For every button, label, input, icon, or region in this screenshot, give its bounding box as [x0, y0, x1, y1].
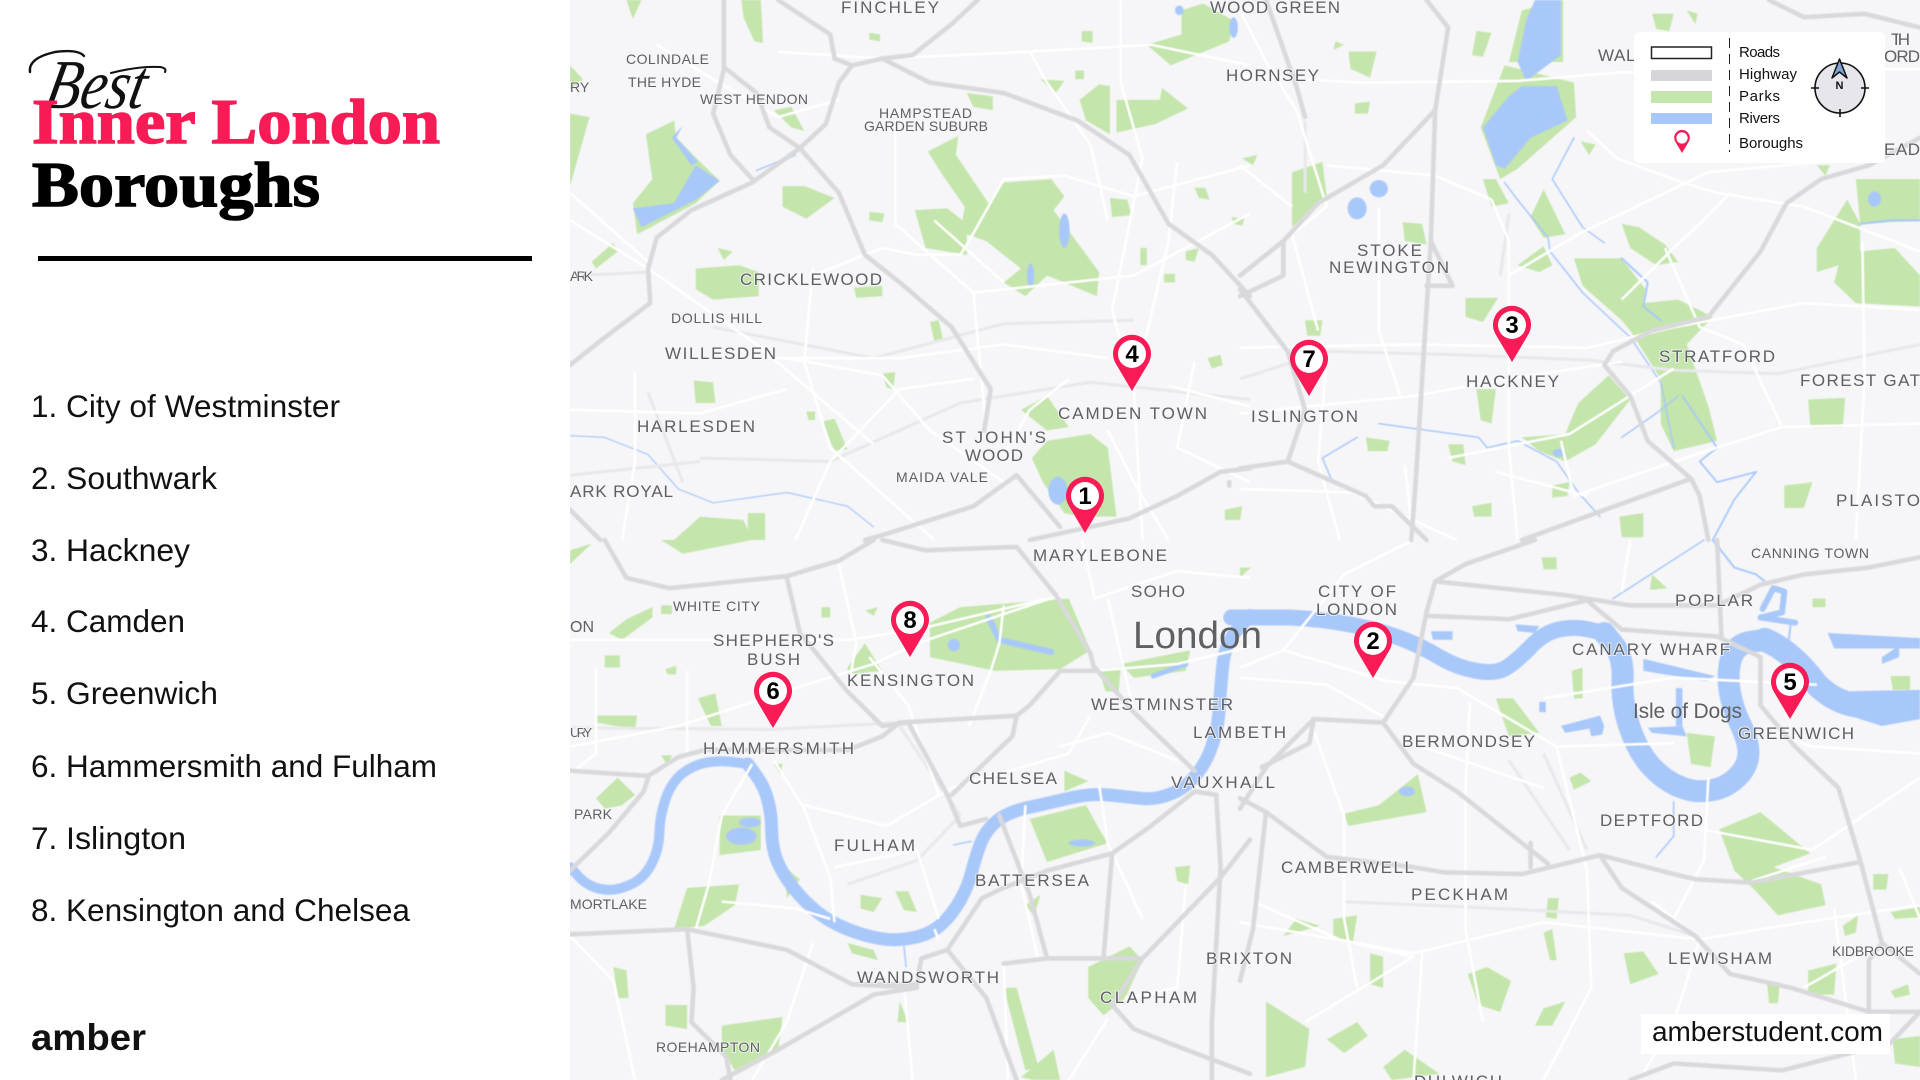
map place labels: WILLESDEN	[665, 344, 776, 363]
map place labels: BERMONDSEY	[1402, 732, 1535, 751]
map place labels: HARLESDEN	[637, 417, 755, 436]
map place labels: BATTERSEA	[975, 871, 1090, 890]
pin 7 Islington	[1290, 340, 1328, 396]
icon: compass	[1811, 59, 1869, 117]
map place labels: CITY OF	[1318, 582, 1396, 601]
panel: map legend: Highway	[1739, 66, 1798, 83]
pin 1 City of Westminster	[1066, 477, 1104, 533]
map place labels: KIDBROOKE	[1832, 943, 1914, 959]
pin 2 Southwark: 2	[1366, 628, 1380, 655]
map place labels: LAMBETH	[1193, 723, 1286, 742]
map place labels: MAIDA VALE	[896, 469, 988, 485]
map place labels: EAD	[1884, 140, 1920, 159]
map place labels: MORTLAKE	[570, 896, 647, 912]
pin 1 City of Westminster: 1	[1078, 483, 1092, 510]
map place labels: CRICKLEWOOD	[740, 270, 882, 289]
map place labels: POPLAR	[1675, 591, 1753, 610]
map place labels: WEST HENDON	[700, 91, 808, 107]
map place labels: STRATFORD	[1659, 347, 1775, 366]
list of boroughs: Southwark	[66, 460, 217, 496]
map place labels: DOLLIS HILL	[671, 310, 762, 326]
list of boroughs: Kensington and Chelsea	[66, 892, 410, 928]
map place labels: ARK	[570, 268, 594, 284]
list of boroughs: 2.	[31, 460, 57, 496]
map place labels: BUSH	[747, 650, 800, 669]
map place labels: PLAISTO	[1836, 491, 1920, 510]
list of boroughs: 5.	[31, 675, 57, 711]
map minor roads	[570, 0, 1920, 1080]
map place labels: ST JOHN'S	[942, 428, 1046, 447]
map place labels: PARK	[574, 806, 613, 822]
website label: amberstudent.com	[1652, 1016, 1883, 1047]
icon: legend pin	[1674, 130, 1690, 153]
list of boroughs: 8.	[31, 892, 57, 928]
pin 5 Greenwich	[1771, 663, 1809, 719]
panel: map of London	[570, 0, 1920, 1080]
map place labels: NEWINGTON	[1329, 258, 1449, 277]
list of boroughs	[31, 388, 437, 928]
heading: Boroughs: Boroughs	[32, 149, 320, 220]
map place labels: Isle of Dogs	[1633, 700, 1742, 723]
map place labels: GREENWICH	[1738, 724, 1854, 743]
map place labels: WANDSWORTH	[857, 968, 999, 987]
map place labels: ISLINGTON	[1251, 407, 1358, 426]
panel: map legend: Parks	[1739, 88, 1780, 105]
map place labels: LEWISHAM	[1668, 949, 1772, 968]
map place labels: ARK ROYAL	[570, 482, 673, 501]
map rivers and reservoirs	[570, 0, 1920, 967]
list of boroughs: 1.	[31, 388, 57, 424]
panel: map legend: Rivers	[1739, 110, 1780, 127]
map place labels: CHELSEA	[969, 769, 1058, 788]
list of boroughs: City of Westminster	[66, 388, 340, 424]
list of boroughs: Greenwich	[66, 675, 218, 711]
title rule	[38, 256, 532, 261]
map place labels: WESTMINSTER	[1091, 695, 1233, 714]
map place labels: FULHAM	[834, 836, 915, 855]
map place labels: ORD	[1884, 47, 1920, 66]
map place labels: FOREST GAT	[1800, 371, 1920, 390]
map place labels: THE HYDE	[628, 74, 701, 90]
map place labels: RY	[570, 79, 590, 95]
map place labels: URY	[570, 725, 592, 740]
map place labels: MARYLEBONE	[1033, 546, 1167, 565]
heading: Inner London: Inner London	[32, 86, 440, 157]
map place labels: SOHO	[1131, 582, 1185, 601]
pin 5 Greenwich: 5	[1783, 669, 1797, 696]
map place labels: CLAPHAM	[1100, 988, 1197, 1007]
list of boroughs: Hackney	[66, 532, 190, 568]
pin 4 Camden: 4	[1125, 341, 1139, 368]
pin 8 Kensington and Chelsea: 8	[903, 607, 917, 634]
map place labels: ROEHAMPTON	[656, 1039, 760, 1055]
map place labels: CAMDEN TOWN	[1058, 404, 1207, 423]
map place labels: COLINDALE	[626, 51, 709, 67]
map place labels: ON	[570, 619, 594, 636]
pin 7 Islington: 7	[1302, 346, 1316, 373]
panel: title and list	[0, 0, 570, 1080]
list of boroughs: 7.	[31, 820, 57, 856]
amber logo: amber	[31, 1017, 146, 1058]
map place labels: London	[1133, 615, 1262, 657]
map place labels: STOKE	[1357, 241, 1422, 260]
map place labels: TH	[1891, 30, 1910, 49]
pin 4 Camden	[1113, 335, 1151, 391]
list of boroughs: 4.	[31, 603, 57, 639]
map place labels: HAMMERSMITH	[703, 739, 854, 758]
panel: map legend: Roads	[1739, 44, 1780, 61]
map place labels: LONDON	[1316, 600, 1397, 619]
map place labels: CANARY WHARF	[1572, 640, 1730, 659]
list of boroughs: 6.	[31, 748, 57, 784]
pin 6 Hammersmith and Fulham: 6	[766, 678, 780, 705]
map place labels: HACKNEY	[1466, 372, 1559, 391]
pin 3 Hackney	[1493, 306, 1531, 362]
map place labels: KENSINGTON	[847, 671, 974, 690]
pin 3 Hackney: 3	[1505, 312, 1519, 339]
map parks	[570, 0, 1920, 1080]
list of boroughs: Camden	[66, 603, 185, 639]
map place labels: HAMPSTEAD	[879, 105, 972, 121]
map place labels: SHEPHERD'S	[713, 631, 834, 650]
list of boroughs: 3.	[31, 532, 57, 568]
panel: map legend	[1634, 32, 1885, 163]
map place labels: WALTH	[1598, 46, 1658, 65]
icon: compass: N	[1836, 80, 1844, 92]
list of boroughs: Islington	[66, 820, 186, 856]
pin 8 Kensington and Chelsea	[891, 601, 929, 657]
pin 2 Southwark	[1354, 622, 1392, 678]
map place labels: WOOD	[965, 446, 1023, 465]
map place labels: GARDEN SUBURB	[864, 118, 988, 134]
list of boroughs: Hammersmith and Fulham	[66, 748, 437, 784]
pin 6 Hammersmith and Fulham	[754, 672, 792, 728]
map place labels: CAMBERWELL	[1281, 858, 1414, 877]
map place labels: CANNING TOWN	[1751, 545, 1869, 561]
map place labels	[570, 0, 1920, 1080]
map place labels: WHITE CITY	[673, 598, 761, 614]
map place labels: BRIXTON	[1206, 949, 1292, 968]
heading: Best script: Best	[39, 47, 157, 124]
map highways	[570, 0, 1920, 1080]
panel: map legend: Boroughs	[1739, 135, 1803, 152]
map place labels: DEPTFORD	[1600, 811, 1703, 830]
map place labels: VAUXHALL	[1171, 773, 1275, 792]
map place labels: PECKHAM	[1411, 885, 1508, 904]
map secondary roads	[570, 121, 1920, 936]
map place labels: HORNSEY	[1226, 66, 1319, 85]
